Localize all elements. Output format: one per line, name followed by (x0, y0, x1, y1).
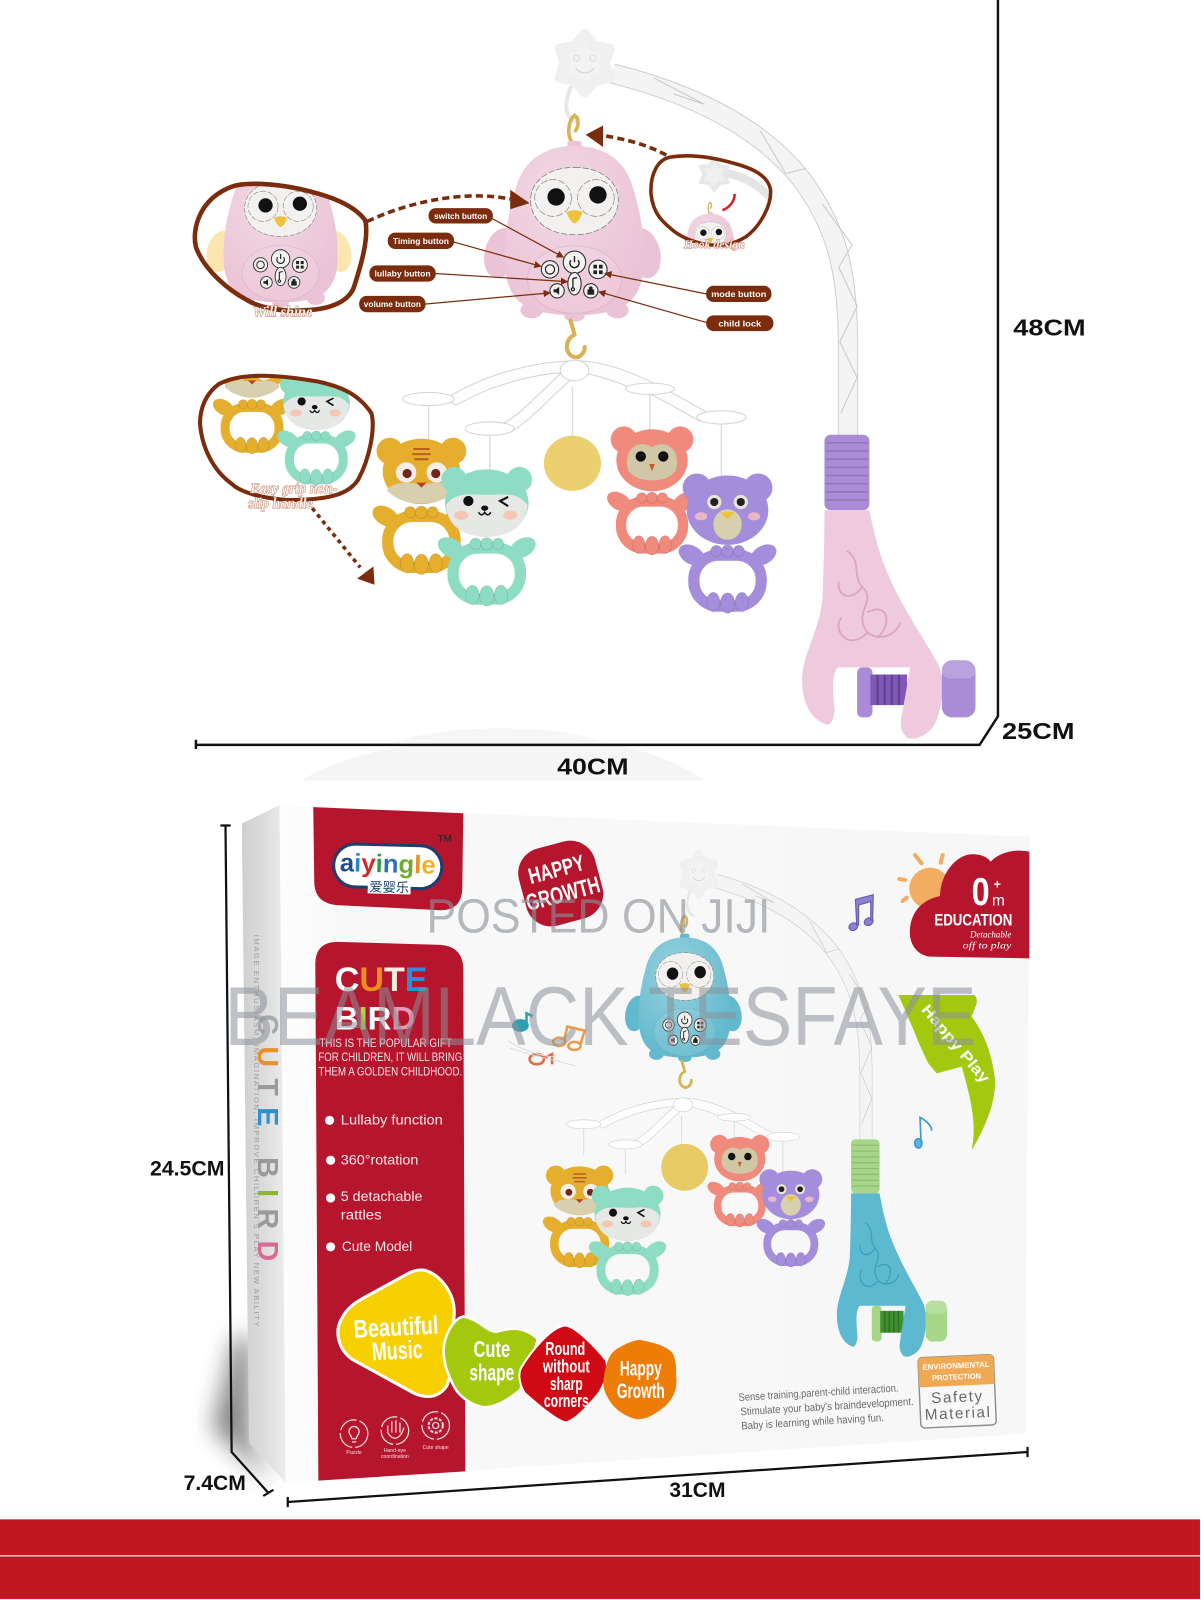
label: volume button: volume button (364, 299, 421, 309)
icon: hand-eye: Hand-eye (384, 1448, 406, 1454)
box purple rattle (754, 1169, 828, 1267)
icon: cute shape (422, 1412, 449, 1451)
icon: puzzle: Puzzle (346, 1450, 362, 1456)
caption: will shine: Will shine (253, 304, 313, 320)
happy growth badge: HAPPY (526, 850, 587, 889)
box stand: star, arm and clamp (683, 853, 947, 1357)
label: lullaby button (369, 265, 436, 282)
label: 7.4CM: 7.4CM (184, 1471, 246, 1495)
purple rattle (675, 473, 780, 613)
education cloud: Detachable (969, 930, 1011, 940)
label: child lock: child lock (718, 319, 762, 329)
icon: puzzle (340, 1420, 368, 1456)
bubble: round without sharp corners: sharp (550, 1373, 583, 1394)
cute bird panel (315, 942, 465, 1481)
feature: rotation: 360°rotation (341, 1152, 418, 1168)
education cloud: 0 (972, 870, 990, 914)
music note purple (848, 895, 874, 932)
icon: cute shape: Cute shape (423, 1445, 449, 1451)
bubble: cute shape: Cute (473, 1336, 510, 1362)
top right badge group (848, 851, 1029, 1150)
label: lullaby button: lullaby button (374, 269, 431, 279)
bubble: beautiful music (338, 1270, 454, 1397)
title: cute: CUTE (335, 961, 428, 999)
label: 24.5CM: 24.5CM (150, 1157, 224, 1181)
brand logo: 爱婴乐 (369, 879, 409, 895)
bubble: round without sharp corners: without (542, 1355, 590, 1376)
box front (280, 805, 1030, 1483)
callout: will shine (192, 182, 369, 317)
pink set hanger (403, 360, 746, 479)
label: 48CM: 48CM (1013, 315, 1086, 341)
icon: hand-eye (381, 1417, 409, 1460)
happy play arrow: Happy Play (918, 1002, 993, 1087)
pink owl music box (479, 115, 666, 357)
label: mode button: mode button (711, 289, 766, 299)
feature: rattles (326, 1189, 423, 1223)
description text: Stimulate your baby's braindevelopment. (740, 1396, 914, 1418)
description text: Sense training,parent-child interaction. (738, 1383, 899, 1404)
bubble: cute shape (444, 1316, 538, 1407)
label: switch button (429, 208, 493, 223)
bubble: happy growth (603, 1340, 677, 1419)
label: child lock (706, 315, 773, 331)
caption: easy grip: slip handle (247, 496, 314, 512)
label: 25CM: 25CM (1002, 718, 1074, 744)
safety material badge: Safety (931, 1388, 984, 1407)
box hanger (566, 1098, 799, 1178)
tagline: FOR CHILDREN, IT WILL BRING (318, 1050, 462, 1064)
box shadow (212, 1337, 273, 1480)
bubble: beautiful music: Beautiful (353, 1311, 439, 1344)
box mint rattle (586, 1186, 669, 1296)
sun icon (899, 855, 951, 909)
dashed arrow: will shine to owl (367, 190, 530, 221)
education cloud: + (994, 877, 1001, 891)
logo panel (313, 807, 463, 910)
happy play arrow (898, 995, 995, 1150)
feature: rattles: rattles (341, 1207, 382, 1223)
pink mobile stand: star, arm and clamp (560, 35, 975, 739)
brand logo (333, 843, 442, 896)
box coral rattle (705, 1135, 775, 1227)
happy growth badge (512, 835, 609, 932)
education cloud: EDUCATION (934, 910, 1012, 929)
label: volume button (359, 296, 426, 312)
safety material badge: Material (924, 1404, 992, 1424)
safety material badge: ENVIRONMENTAL (922, 1360, 990, 1372)
feature: cute model: Cute Model (342, 1239, 412, 1255)
bubble: happy growth: Happy (620, 1357, 662, 1381)
caption: easy grip: Easy grip non- (249, 481, 338, 497)
music notes left (508, 1013, 585, 1066)
watermark: name: BEAMLACK TESFAYE (224, 969, 977, 1063)
button leader lines (424, 218, 706, 322)
dotted arrow: grip to rattles (312, 508, 374, 585)
bubble: round without sharp corners: Round (545, 1338, 585, 1359)
box dimension lines (220, 826, 1028, 1507)
label: timing button (388, 233, 454, 249)
happy growth badge: GROWTH (523, 871, 603, 916)
caption: hook design: Hook design (683, 238, 745, 251)
dimension frame for the mobile (196, 0, 998, 749)
safety material badge: PROTECTION (932, 1372, 982, 1383)
spine title: C U T E B I R D (251, 1014, 283, 1261)
bubble: cute shape: shape (469, 1360, 514, 1386)
brand logo: aiyingle (339, 849, 436, 880)
yellow ball (544, 436, 601, 491)
product box (242, 805, 1030, 1483)
feature: rattles: 5 detachable (341, 1189, 423, 1205)
coral rattle (604, 426, 700, 555)
label: 40CM: 40CM (557, 753, 629, 779)
education cloud: m (992, 893, 1005, 910)
spine small text: IMAGE ENTHUSIASM, IMAGINATION, IMPROVE CHILDREN'S PLAY NEW ABILITY (252, 935, 261, 1328)
box yellow ball (661, 1144, 708, 1191)
tagline: THEM A GOLDEN CHILDHOOD. (318, 1065, 462, 1079)
label: mode button (706, 286, 771, 302)
callout: easy grip handle (198, 374, 375, 512)
tagline: THIS IS THE POPULAR GIFT (319, 1036, 452, 1050)
footer band (0, 1519, 1200, 1599)
blue owl music box (622, 916, 745, 1087)
icon: hand-eye: coordination (381, 1454, 409, 1460)
feature: lullaby: Lullaby function (341, 1112, 443, 1128)
floor arc behind the 40CM label (301, 728, 704, 781)
callout: hook design (649, 154, 772, 251)
bubble: round without sharp corners: corners (544, 1390, 589, 1411)
box spine (242, 805, 286, 1483)
music note blue (915, 1117, 932, 1148)
trademark: TM (438, 834, 452, 845)
tiger rattle (369, 438, 474, 574)
education cloud (910, 851, 1029, 958)
box tiger rattle (540, 1166, 619, 1268)
label: switch button: switch button (434, 211, 487, 221)
bubble: beautiful music: Music (371, 1336, 423, 1366)
safety material badge (918, 1354, 996, 1428)
bubble: happy growth: Growth (617, 1379, 665, 1403)
title: bird: BIRD (335, 1000, 415, 1037)
watermark: posted on jiji: POSTED ON JIJI (427, 891, 770, 944)
mint bear rattle (434, 467, 539, 606)
dashed arrow: hook design to hook (586, 126, 666, 155)
label: 31CM: 31CM (669, 1478, 725, 1502)
description text: Baby is learning while having fun. (741, 1412, 884, 1432)
bubble: round without sharp corners (519, 1326, 607, 1422)
label: timing button: Timing button (393, 236, 449, 246)
education cloud: off to play (963, 940, 1011, 950)
